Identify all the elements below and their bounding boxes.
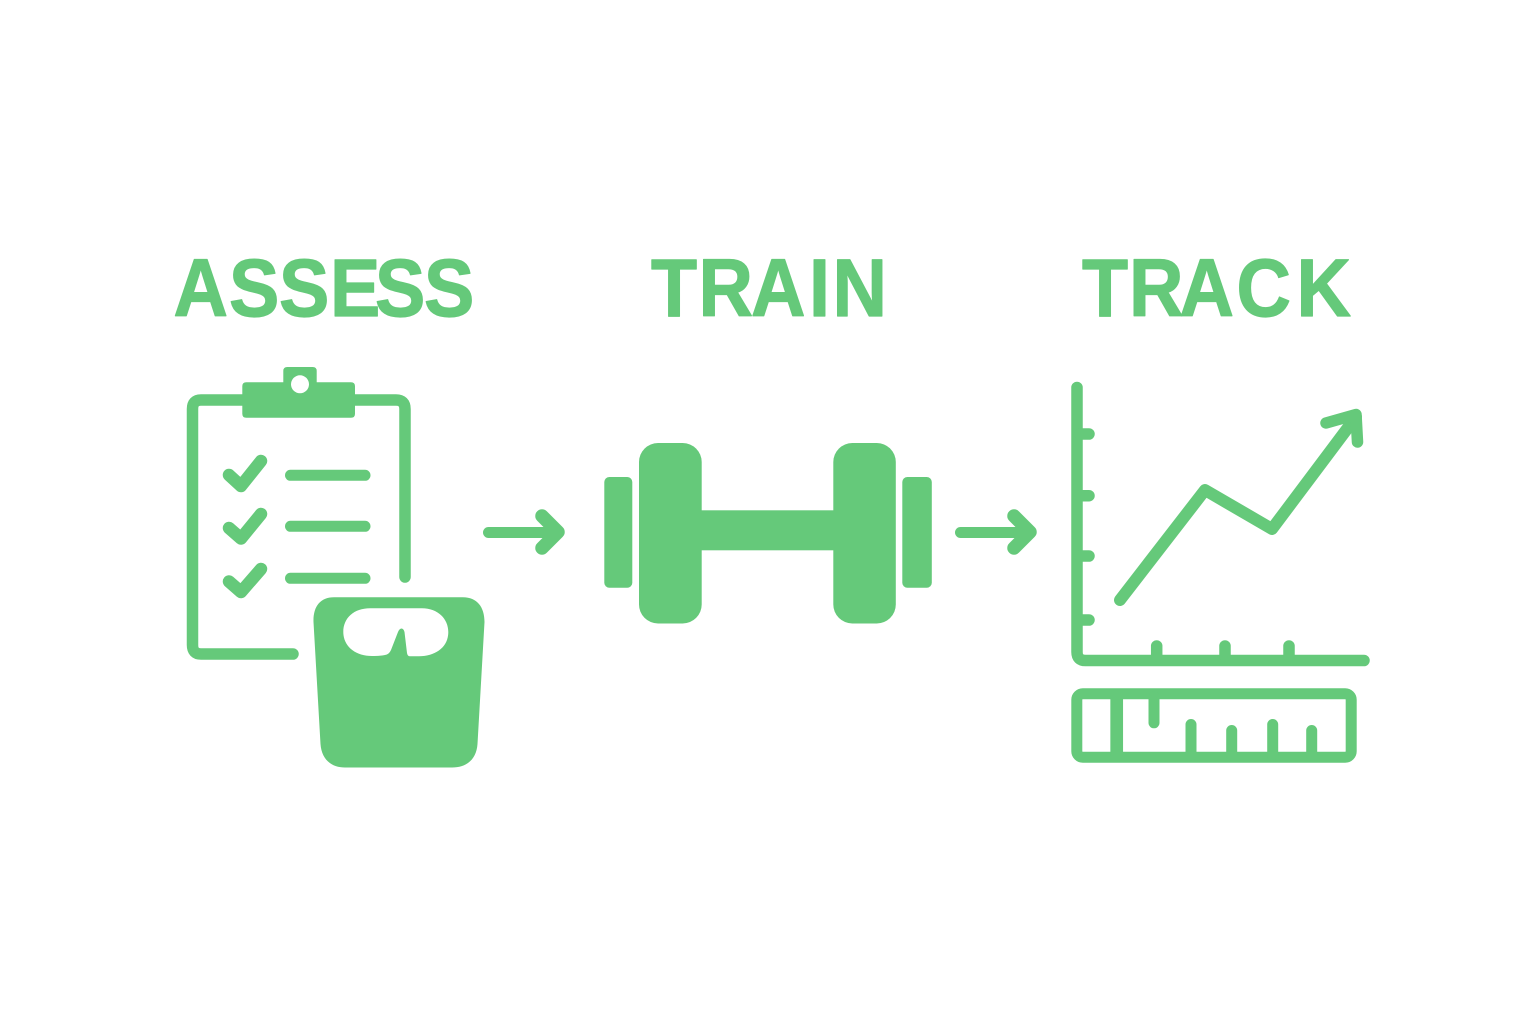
trend line bbox=[1120, 417, 1356, 600]
checklist lines bbox=[290, 475, 365, 578]
checkmarks bbox=[229, 461, 261, 592]
heading: ASSESS: ASSESS bbox=[174, 242, 474, 334]
icon: dumbbell bbox=[604, 443, 932, 624]
icon: weighing scale bbox=[313, 597, 484, 768]
trend arrow head bbox=[1326, 414, 1358, 442]
heading: TRAIN: TRAIN bbox=[651, 242, 887, 334]
icon: clipboard checklist bbox=[192, 367, 405, 654]
arrow: assess to train bbox=[488, 516, 558, 548]
clipboard clip bbox=[242, 367, 355, 418]
heading: TRACK: TRACK bbox=[1082, 242, 1351, 334]
icon: ruler bbox=[1077, 694, 1351, 757]
arrow: train to track bbox=[960, 516, 1030, 548]
icon: progress chart bbox=[1077, 388, 1364, 660]
